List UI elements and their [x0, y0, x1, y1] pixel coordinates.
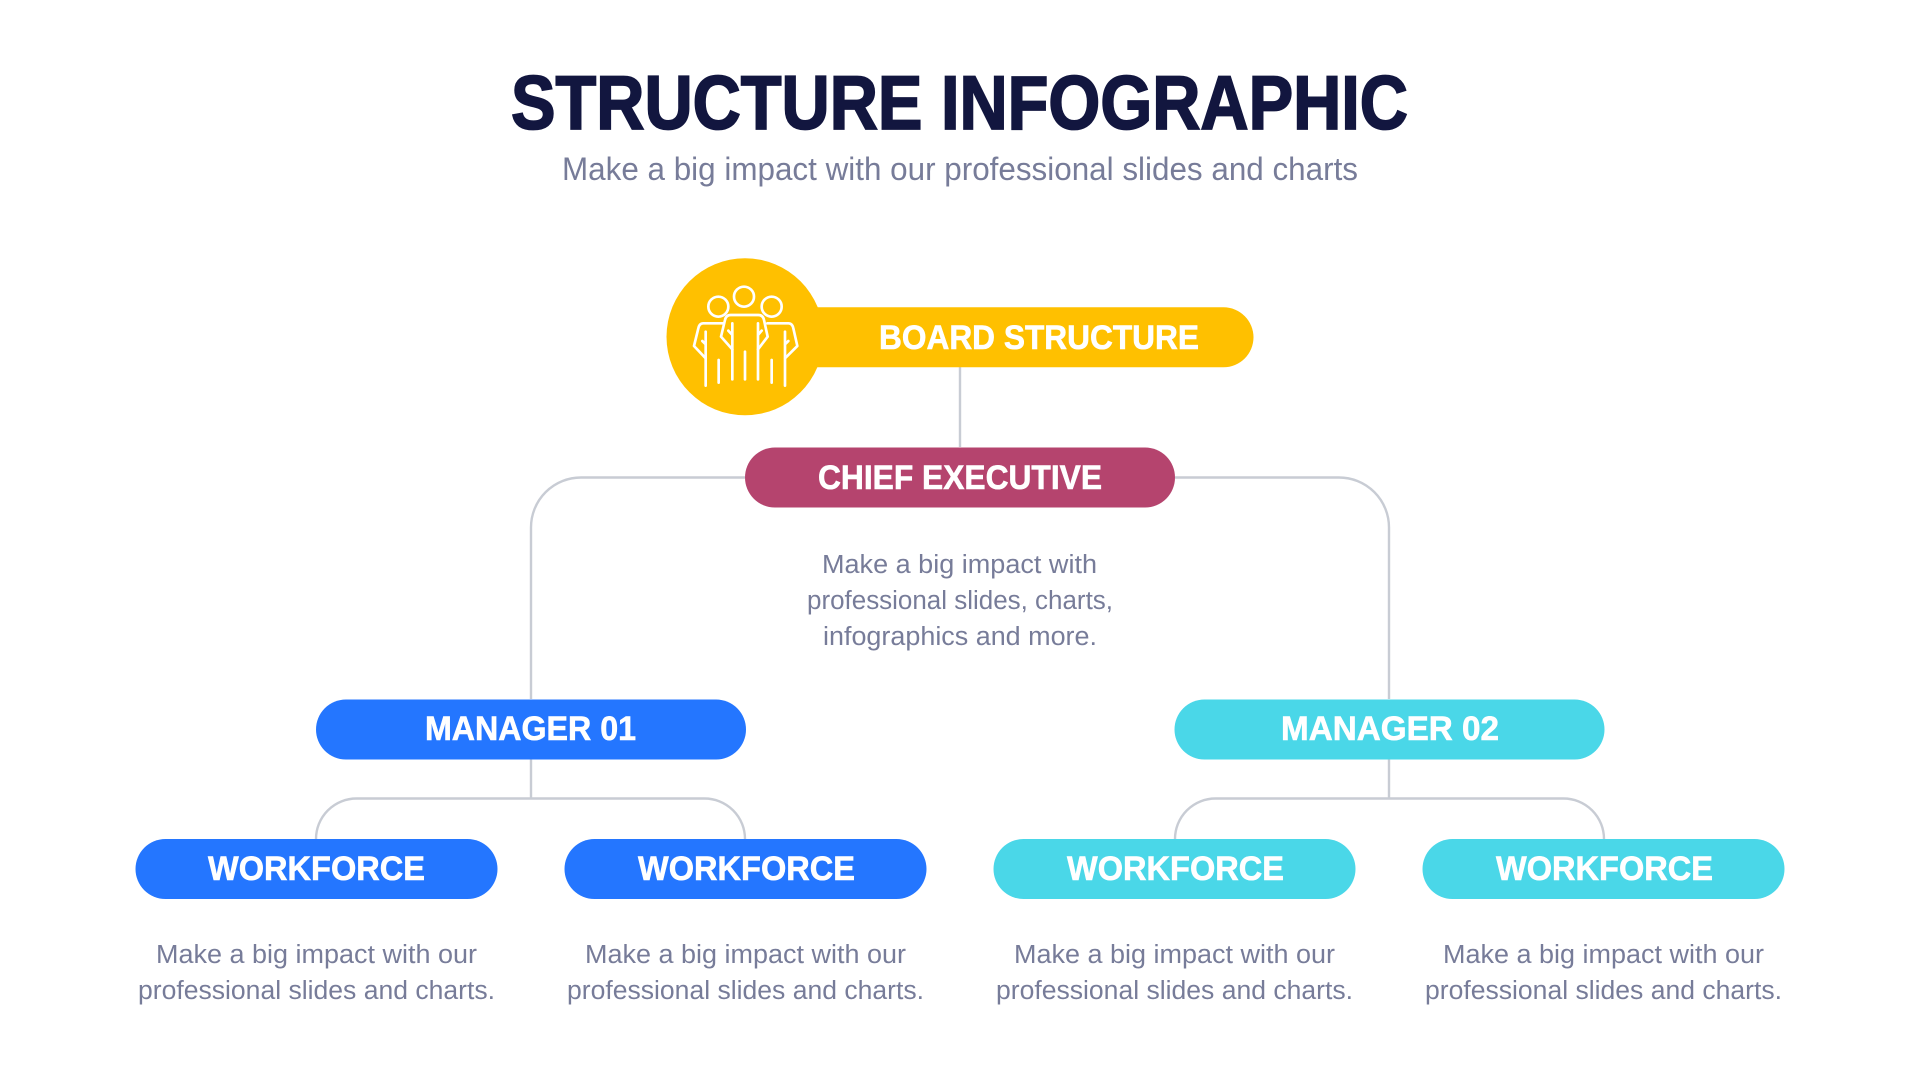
workforce 3 description: professional slides and charts. [996, 977, 1353, 1005]
workforce 4 node [1422, 839, 1784, 899]
connector: manager 01 to workforce [316, 759, 745, 839]
board structure node [666, 258, 1254, 415]
manager 01 node: MANAGER 01 [425, 710, 636, 748]
workforce 4 node: WORKFORCE [1496, 850, 1713, 888]
workforce 1 node [136, 839, 498, 899]
workforce 2 description [567, 941, 924, 1005]
connector: board to chief executive [959, 367, 961, 447]
board bar [745, 307, 1254, 367]
workforce 1 description [138, 941, 495, 1005]
chief executive description [807, 551, 1113, 651]
workforce 3 node [994, 839, 1356, 899]
workforce 1 description: professional slides and charts. [138, 977, 495, 1005]
connector: chief executive to managers [531, 478, 1389, 699]
workforce 4 description: professional slides and charts. [1425, 977, 1782, 1005]
workforce 2 description: Make a big impact with our [585, 941, 907, 969]
chief executive node [745, 448, 1175, 508]
workforce 1 description: Make a big impact with our [156, 941, 478, 969]
subtitle: Make a big impact with our professional slides and charts [562, 151, 1358, 187]
chief executive node: CHIEF EXECUTIVE [818, 459, 1102, 497]
board label: BOARD STRUCTURE [879, 319, 1199, 357]
workforce 3 description [996, 941, 1353, 1005]
manager 01 node [316, 700, 746, 760]
workforce 2 node: WORKFORCE [638, 850, 855, 888]
icon: group of people [694, 287, 797, 386]
manager 02 node: MANAGER 02 [1281, 710, 1499, 748]
workforce 1 node: WORKFORCE [208, 850, 425, 888]
title: STRUCTURE INFOGRAPHIC [511, 61, 1408, 146]
connector: manager 02 to workforce [1175, 759, 1604, 839]
board circle [666, 258, 824, 415]
workforce 3 node: WORKFORCE [1067, 850, 1284, 888]
workforce 4 description: Make a big impact with our [1443, 941, 1765, 969]
workforce 2 node [564, 839, 926, 899]
chief executive description: professional slides, charts, [807, 587, 1113, 615]
workforce 2 description: professional slides and charts. [567, 977, 924, 1005]
manager 02 node [1174, 700, 1604, 760]
chief executive description: Make a big impact with [822, 551, 1097, 579]
chief executive description: infographics and more. [823, 623, 1097, 651]
workforce 3 description: Make a big impact with our [1014, 941, 1336, 969]
workforce 4 description [1425, 941, 1782, 1005]
